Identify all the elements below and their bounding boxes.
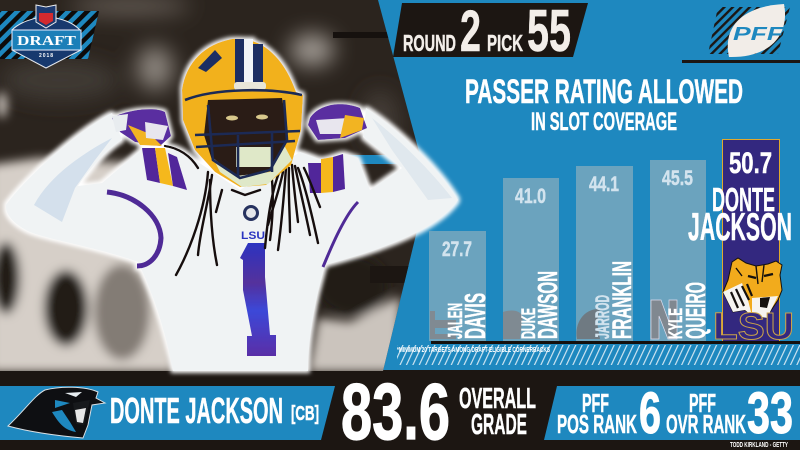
overall label: OVERALL [459,383,536,415]
right sleeve stripe [323,202,358,267]
team logo: helmet [577,309,600,339]
position: [CB] [291,403,319,425]
PFF logo [682,4,800,63]
bar: Duke Dawson [503,178,563,341]
helmet [182,39,303,187]
ranks strip [544,386,800,440]
icon: Panthers logo [8,387,105,438]
value: 27.7 [442,238,472,261]
left arm shading [34,138,112,222]
draft band [12,30,81,50]
football shape [728,4,785,57]
chart baseline [431,341,800,344]
last name: DAVIS [460,293,492,339]
jersey number 1 [240,243,276,356]
team logo: Northwestern [651,300,677,339]
dreadlocks [165,146,320,275]
round label: ROUND [403,30,456,56]
footnote: *MINIMUM 20 TARGETS AMONG DRAFT-ELIGIBLE CORNERBACKS [397,345,550,354]
last name: DAWSON [532,271,563,339]
right fist [308,104,367,140]
team logo: Florida [503,310,523,339]
player name: DONTE JACKSON [110,390,283,431]
PFF pos label: PFF [582,388,609,418]
right arm shading [372,118,452,200]
value: 50.7 [729,147,772,180]
grade label: GRADE [471,409,527,441]
first name: DUKE [519,308,540,339]
icon: LSU tiger [723,258,782,318]
pos rank label: POS RANK [557,409,637,439]
bar: Jarrod Franklin [576,166,637,341]
LSU wordmark: LSU [713,306,794,348]
name strip [0,386,335,440]
facemask [185,90,302,178]
PFF wordmark: PFF [733,24,784,44]
bar: Kyle Queiro [650,160,711,341]
chart subtitle: IN SLOT COVERAGE [531,108,677,136]
bar chart [429,140,794,348]
left sleeve stripe [107,192,161,266]
PFF ovr label: PFF [689,388,716,418]
first name: JALEN [445,303,467,339]
eyes [226,114,268,120]
jersey body and arms [6,108,458,371]
bottom dark band [0,370,800,450]
pos rank value: 6 [639,381,661,446]
LSU chest mark: LSU [241,230,265,242]
round and pick banner [393,0,588,64]
value: 41.0 [515,185,546,208]
last name: FRANKLIN [607,261,637,339]
value: 44.1 [589,173,619,196]
mouth guard [213,145,292,187]
left fist [112,109,171,146]
face [204,98,288,180]
helmet stripes [235,39,263,83]
round number: 2 [460,0,481,64]
last name: QUEIRO [680,282,711,339]
left shoulder stripes [142,148,187,190]
draft logo with hatch [0,5,99,68]
pick label: PICK [487,30,523,56]
value: 45.5 [662,167,693,190]
bar: Jalen Davis [429,231,492,341]
player photo [6,39,458,371]
draft word: DRAFT [17,34,77,49]
helmet LSU band [198,50,266,90]
team logo: UCF [430,311,456,339]
year: 2018 [39,53,53,59]
SEC patch [243,205,259,221]
first name: JARROD [593,295,614,339]
right shoulder stripes [308,154,345,193]
first name: KYLE [666,308,687,339]
hatched strip [397,345,800,365]
photo accent stripes [333,32,410,283]
shield [12,18,81,68]
photo background [0,0,430,372]
bar: Donte Jackson [688,140,794,348]
NFL crest [36,5,56,28]
